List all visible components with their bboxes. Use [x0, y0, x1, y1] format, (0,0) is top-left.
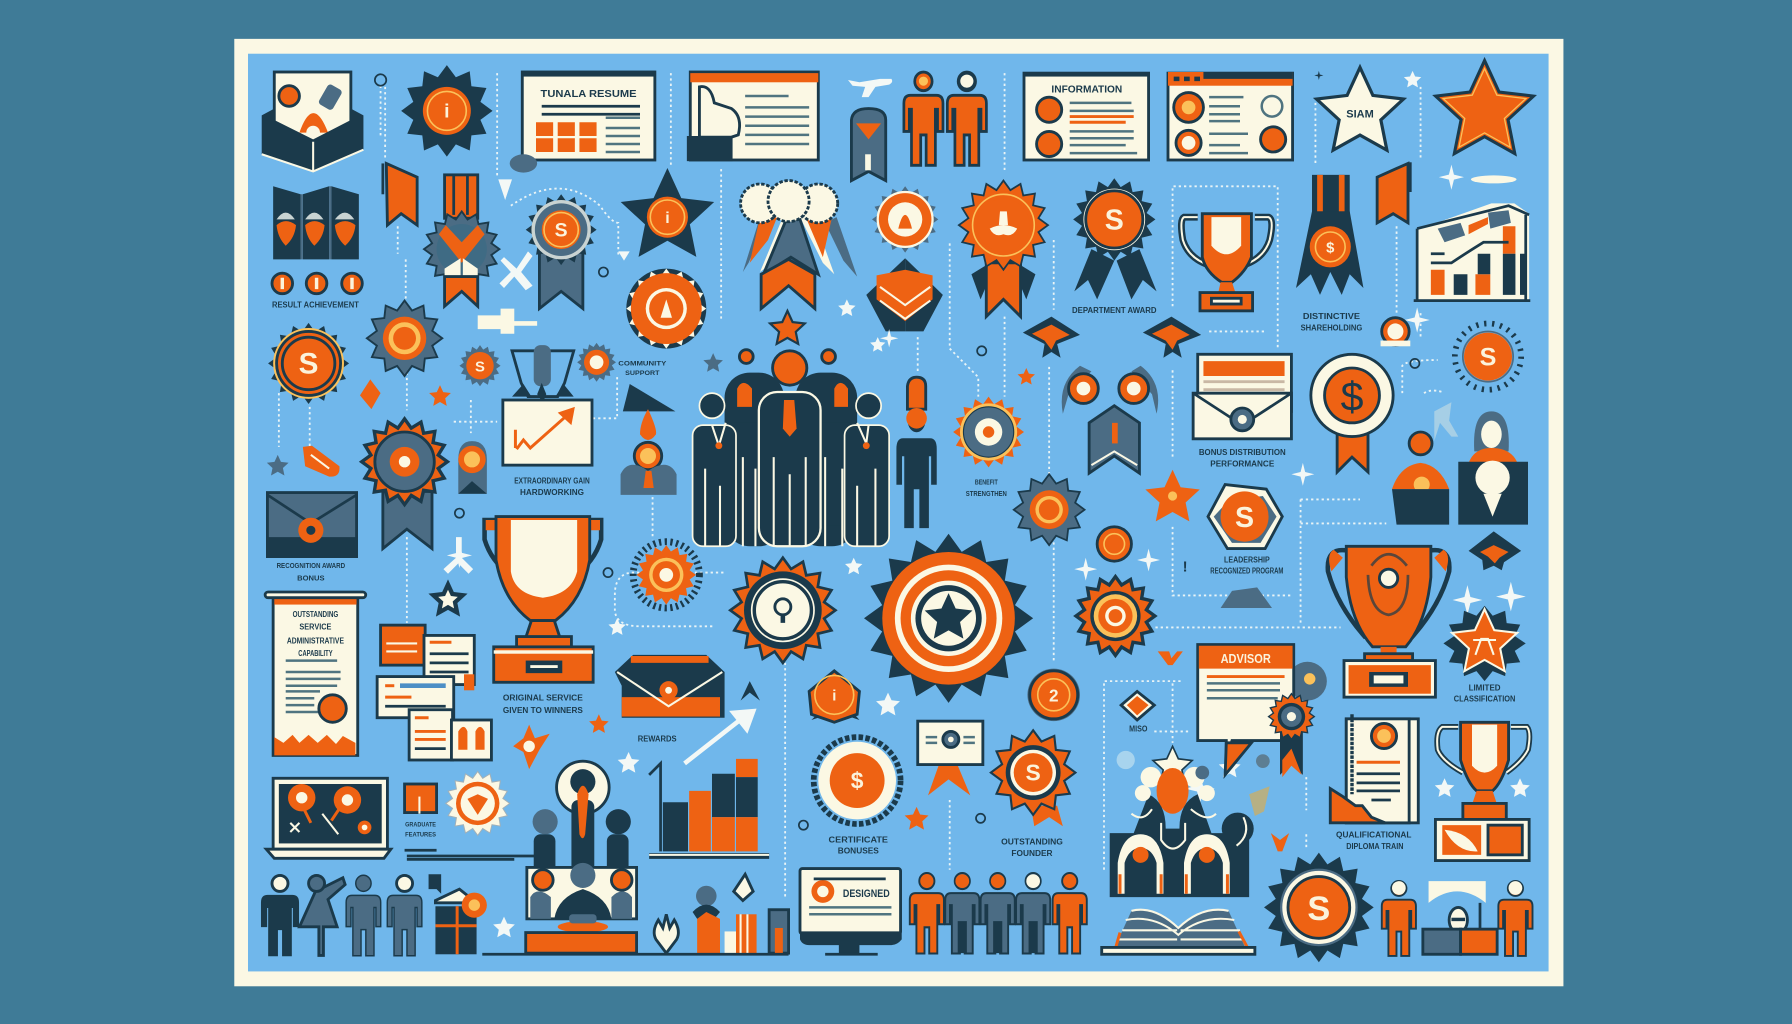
icon: dark star small: [703, 353, 723, 372]
people: two orange figures: [904, 72, 986, 165]
people: central leadership group: [693, 350, 889, 546]
icon: twin cameo badges and tag: [1062, 366, 1158, 473]
baseline rule: [482, 953, 789, 955]
blue panel: [248, 54, 1549, 971]
icon: scattered white stars: [447, 165, 1530, 937]
icon: orange sparkle: [513, 725, 550, 769]
document: scroll certificate: [265, 592, 366, 755]
badge: orange burst ribbon: [959, 181, 1048, 317]
icon: graduate figure: [621, 384, 677, 495]
document: resume card: [522, 71, 655, 160]
icon: orange star: [1145, 470, 1200, 521]
icon: small dark star: [428, 579, 468, 617]
caption: [966, 478, 1007, 498]
badge: large orange target with portrait: [728, 555, 838, 665]
icon: white star with label: [1317, 67, 1403, 150]
icon: cloud: [510, 154, 537, 173]
caption: [1454, 682, 1515, 704]
badge: cream heart seal: [446, 771, 510, 835]
badge: hexagon dollar shield: S: [1235, 502, 1254, 534]
badge: ringed dollar coin: S: [299, 348, 318, 381]
caption: ORIGINAL SERVICE: [503, 693, 583, 703]
icon: small figure mark: [741, 681, 760, 701]
scroll heading: OUTSTANDING: [293, 609, 339, 619]
icon: small coin on tray: [1381, 318, 1410, 346]
icon: small trophy: [512, 345, 574, 402]
caption with underlines: GRADUATE: [405, 821, 436, 828]
badge: dollar with dark tails: [1073, 178, 1157, 299]
badge: amber coin: [1027, 669, 1080, 721]
trophy: cream right lower: [1435, 722, 1529, 861]
badge: slate ribbon with dollar coin: S: [555, 220, 568, 242]
icon: small star: [770, 311, 805, 344]
document: scroll certificate: SERVICE: [299, 622, 332, 632]
badge: dollar with dark tails: S: [1105, 205, 1124, 237]
badge: dollar with ribbon: S: [1026, 760, 1041, 786]
caption: RECOGNITION AWARD: [277, 561, 346, 570]
badge: large dollar with ribbon: [1311, 354, 1393, 472]
bubble heading: ADVISOR: [1221, 652, 1271, 666]
icon: gift with coin: [435, 889, 487, 954]
bar chart with arrow axis: [649, 759, 769, 856]
icon: chevron shield: [866, 258, 943, 331]
caption: HARDWORKING: [520, 487, 584, 497]
chart card with bars: [1414, 203, 1530, 301]
icon: orange ribbon right: [1377, 162, 1410, 223]
icon: small star orange: [1018, 368, 1035, 385]
badge: orange coin with tails: [809, 671, 859, 722]
caption: [1210, 555, 1284, 576]
icon: tall tag: [851, 109, 886, 181]
badge: orange frilled rosette: [626, 269, 706, 349]
badge: frilled orange rosette: $: [851, 768, 864, 794]
document: speech bubble award: [1198, 645, 1327, 775]
document: profile card: [1168, 72, 1293, 160]
caption: [503, 693, 583, 715]
caption: OUTSTANDING: [1001, 838, 1063, 847]
icon: orange coin: [1097, 527, 1131, 561]
icon: exclamation: !: [1183, 559, 1188, 575]
badge: dark star with coin: [621, 168, 714, 257]
icon: cream trophy: [1181, 214, 1272, 311]
badge: small coin right: [577, 343, 616, 382]
badge: dark target burst: [1073, 574, 1158, 658]
caption: LEADERSHIP: [1224, 555, 1270, 564]
caption: SUPPORT: [625, 370, 660, 377]
caption: DEPARTMENT AWARD: [1072, 305, 1157, 315]
icon: flag tab: [429, 874, 441, 894]
icon: blurred text pill: [1471, 175, 1517, 183]
caption: RECOGNIZED PROGRAM: [1210, 567, 1284, 576]
people: pyramid group: [1110, 746, 1254, 897]
caption with underlines: [405, 821, 546, 859]
people: columns with figure: [693, 874, 789, 953]
caption: COMMUNITY: [618, 361, 667, 368]
caption with underlines: FEATURES: [405, 832, 436, 839]
icon: small capsule tag: [458, 441, 487, 494]
icon: diamond with caption: [1121, 691, 1154, 733]
people: four bottom left figures: [261, 875, 422, 956]
badge: small orange sun: [953, 397, 1024, 467]
badge: dark star with coin: i: [665, 210, 670, 227]
icon: open book: [1102, 910, 1255, 954]
icon: orange ribbon: [383, 163, 417, 225]
trophy: large left: [485, 517, 601, 682]
medal: crossed ribbon: [424, 175, 499, 306]
badge: large dollar with ribbon: $: [1341, 373, 1364, 419]
small line glyphs scattered: [375, 74, 1419, 830]
caption: BONUS DISTRIBUTION: [1199, 447, 1286, 457]
badge: rayed dollar coin: [1455, 323, 1521, 390]
icon: white tripod mark: [443, 537, 473, 574]
medal: dark ribbon with coin: [1296, 175, 1363, 295]
caption: EXTRAORDINARY GAIN: [514, 475, 590, 485]
people: presenter with audience: [526, 761, 637, 953]
badge: ringed dollar coin: [270, 325, 347, 402]
caption: SHAREHOLDING: [1301, 322, 1363, 332]
caption: RESULT ACHIEVEMENT: [272, 300, 359, 309]
badge: orange coin with tails: i: [832, 689, 836, 705]
person: dark standing figure: [896, 377, 937, 528]
icon: orange star: [1436, 61, 1533, 154]
caption: DIPLOMA TRAIN: [1346, 841, 1403, 851]
badge: orange rosette: [872, 186, 938, 253]
caption: CERTIFICATE: [829, 835, 889, 844]
document: scroll certificate: ADMINISTRATIVE: [287, 635, 344, 645]
icon: folded panels with drops: [273, 186, 359, 259]
icon: small orange star: [589, 714, 609, 733]
caption: [1336, 830, 1411, 851]
laptop: [266, 778, 391, 858]
medal: small rosette and ribbon: [1269, 694, 1314, 777]
caption: PERFORMANCE: [1210, 458, 1275, 468]
caption: STRENGTHEN: [966, 489, 1007, 498]
badge: dollar with ribbon: [991, 730, 1075, 826]
medal: triple rosette: [741, 181, 857, 309]
star label: SIAM: [1346, 109, 1374, 121]
badge: small slate coin: S: [475, 359, 485, 375]
envelope with document: [1193, 354, 1291, 439]
trophy: large orange right: [1328, 546, 1449, 697]
caption: [1001, 838, 1063, 858]
envelope: dark with seal: [615, 655, 725, 718]
badge: slate ribbon with dollar coin: [526, 194, 597, 309]
icon: mountain cluster: [1221, 587, 1272, 608]
icon: orange small star: [429, 385, 451, 406]
icon: orange folder: [405, 784, 437, 814]
document title: INFORMATION: [1051, 85, 1122, 96]
badge: large slate coin with ribbon: [359, 416, 450, 549]
cards: cluster of documents: [377, 625, 491, 760]
badge: burst with coin: [1014, 474, 1085, 545]
icon: dark star and orange tag: [267, 446, 340, 477]
chart card with rising arrow: [503, 400, 592, 465]
arrow: white rising: [685, 709, 757, 763]
icon: orange V marks: [1158, 651, 1289, 851]
badge: spiky orange sun: [633, 542, 699, 608]
icon: dashed markers: [498, 179, 630, 290]
badge: dark burst with coin: i: [444, 101, 450, 123]
monitor: desktop screen: [800, 869, 902, 954]
icon: plug connector: [478, 309, 537, 334]
icon: diamond with caption: MISO: [1129, 724, 1147, 733]
icon: certificate with ribbon: [918, 721, 983, 795]
people: five bottom middle figures: [910, 873, 1087, 953]
icon: orange diamond: [360, 379, 381, 409]
icon: three small coins: [272, 273, 362, 294]
icon: white vase: [654, 914, 678, 953]
cream frame: [234, 39, 1563, 986]
caption: [618, 361, 667, 377]
medal: dark ribbon with coin: $: [1326, 241, 1335, 257]
caption: FOUNDER: [1011, 849, 1053, 858]
badge: frilled orange rosette: [814, 737, 901, 824]
document title: TUNALA RESUME: [541, 89, 637, 100]
icon: graduation cap right: [1469, 531, 1521, 570]
badge: central large target star: [864, 534, 1033, 703]
icon: pale globe and bits: [1117, 751, 1270, 816]
caption: LIMITED: [1469, 682, 1501, 692]
caption: BONUS: [297, 574, 325, 583]
icon: plane: [848, 79, 892, 97]
caption: [1199, 447, 1286, 468]
icon: graduation caps: [1023, 317, 1201, 358]
icon: open box with card: [262, 72, 363, 171]
caption: DISTINCTIVE: [1303, 311, 1360, 321]
icon: sparkle markers row one: [1314, 71, 1421, 87]
caption: GIVEN TO WINNERS: [503, 705, 583, 715]
person: pedestal orange figure: [1392, 432, 1449, 525]
badge: small slate coin: [459, 345, 501, 386]
caption: [1301, 311, 1363, 332]
badge: dark burst with coin: [401, 65, 493, 157]
envelope: dark coin envelope: [267, 493, 357, 557]
badge: slate burst coin: [367, 301, 442, 376]
document: information card: [1024, 72, 1149, 160]
document: thumbs up card: [687, 72, 818, 161]
caption: BENEFIT: [975, 478, 998, 487]
monitor title: DESIGNED: [843, 888, 890, 900]
badge: bottom dollar burst: S: [1307, 890, 1330, 928]
badge: amber coin: 2: [1049, 686, 1058, 706]
caption: REWARDS: [638, 735, 677, 744]
badge: rayed dollar coin: S: [1480, 344, 1496, 372]
badge: hexagon dollar shield: [1208, 485, 1282, 549]
caption: QUALIFICATIONAL: [1336, 830, 1411, 840]
caption: [277, 561, 346, 583]
badge: bottom dollar burst: [1264, 853, 1374, 962]
caption: BONUSES: [838, 847, 880, 856]
document: scroll certificate: CAPABILITY: [298, 648, 333, 658]
caption: [514, 475, 590, 497]
caption: [829, 835, 889, 856]
icon: ghost cross mark: [1434, 402, 1458, 441]
people: bottom right with desk: [1382, 881, 1533, 956]
caption: CLASSIFICATION: [1454, 694, 1515, 704]
icon: small orange star: [905, 807, 929, 830]
document: report with chart: [1330, 714, 1418, 823]
badge: star burst right: [1443, 606, 1526, 681]
person: woman on pedestal: [1458, 411, 1528, 525]
